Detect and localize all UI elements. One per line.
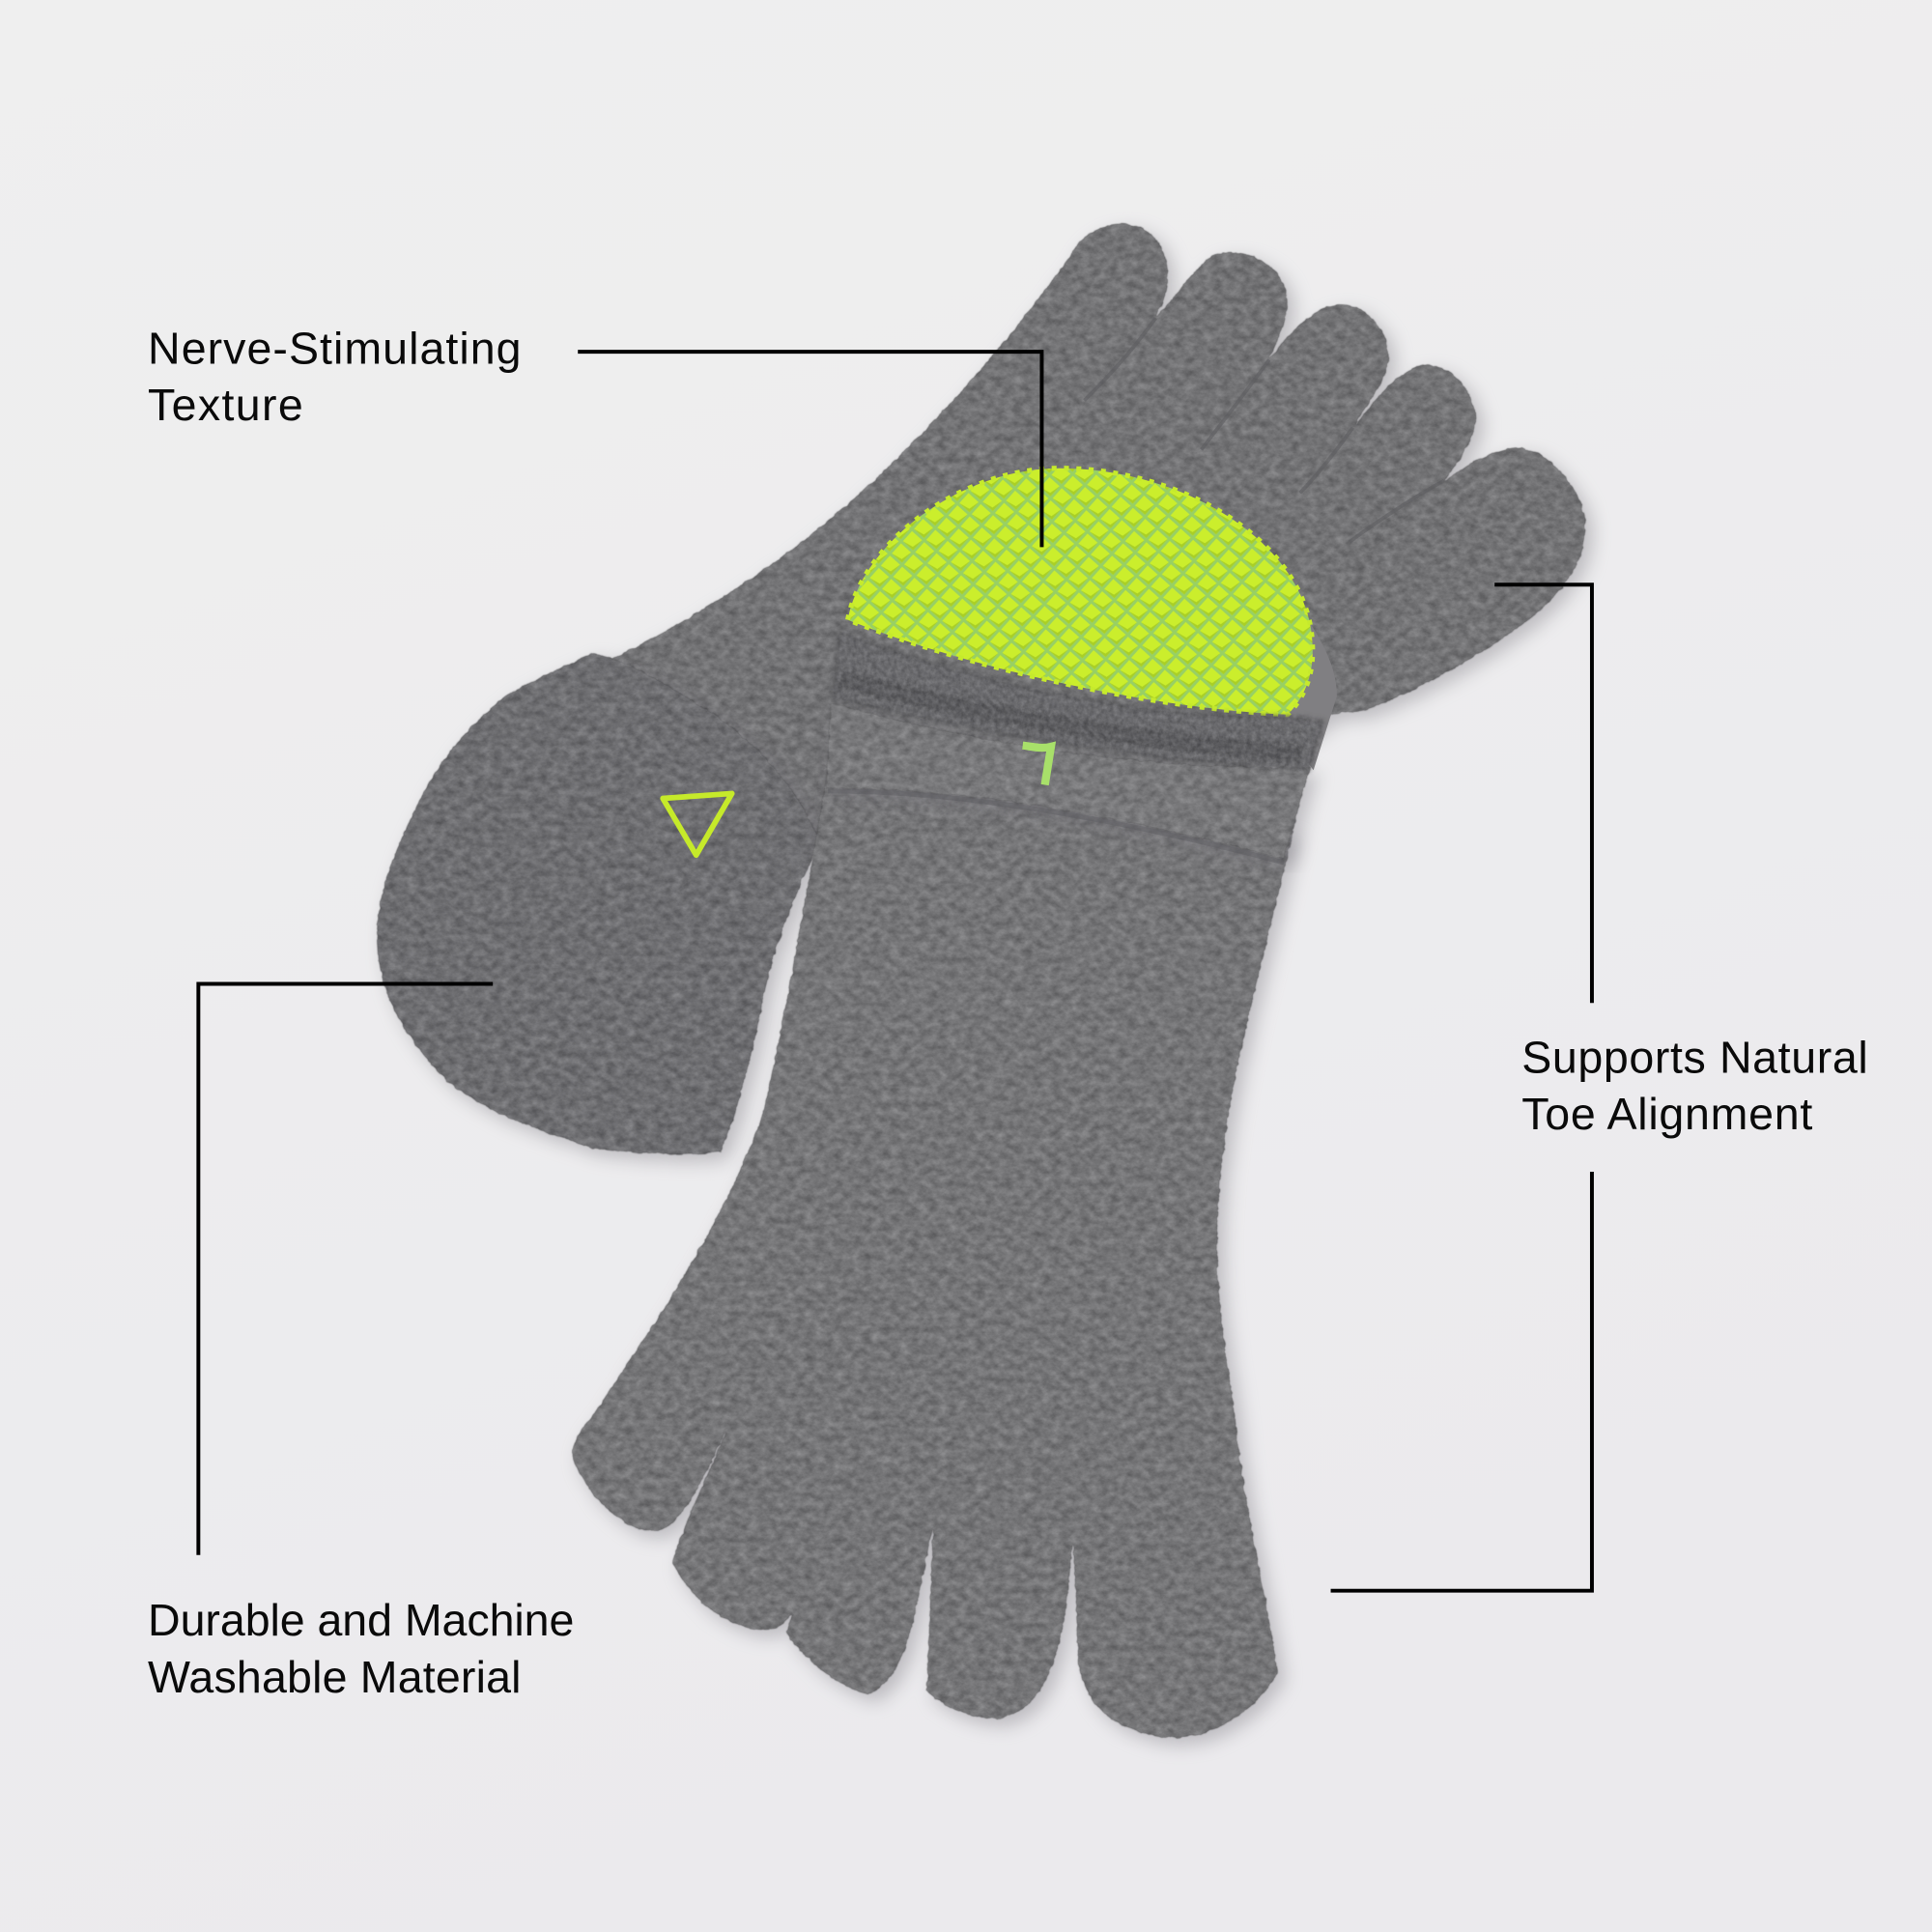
folded cuff band	[826, 702, 1311, 860]
label: Toe Alignment	[1521, 1089, 1812, 1139]
front sock body with five toes	[573, 764, 1293, 1738]
label: Texture	[148, 380, 303, 430]
callout: natural toe alignment	[1331, 584, 1868, 1591]
heel of back sock	[377, 653, 819, 1154]
illustration: pair of toe socks	[377, 223, 1586, 1738]
callout: nerve-stimulating texture	[148, 323, 1041, 547]
label: Durable and Machine	[148, 1595, 574, 1645]
grip pad: green textured insole	[848, 469, 1313, 715]
label: Nerve-Stimulating	[148, 323, 522, 373]
back sock: sole with five toes	[610, 223, 1586, 887]
lower leader line	[1331, 1172, 1592, 1591]
upper leader line	[1494, 584, 1592, 1003]
label: Washable Material	[148, 1652, 522, 1702]
terry lining at cuff edge	[831, 629, 1325, 771]
fold shadow line	[828, 791, 1284, 863]
leader line	[578, 352, 1041, 547]
label: Supports Natural	[1521, 1032, 1868, 1082]
size letter L	[1023, 746, 1051, 784]
icon: embroidered triangle logo	[663, 793, 732, 855]
inner rim of front sock	[1282, 616, 1337, 770]
darker terry strip	[840, 680, 1303, 754]
leader line	[198, 983, 493, 1555]
callout: durable material	[148, 983, 574, 1702]
toe separations on back sock	[1084, 318, 1444, 542]
